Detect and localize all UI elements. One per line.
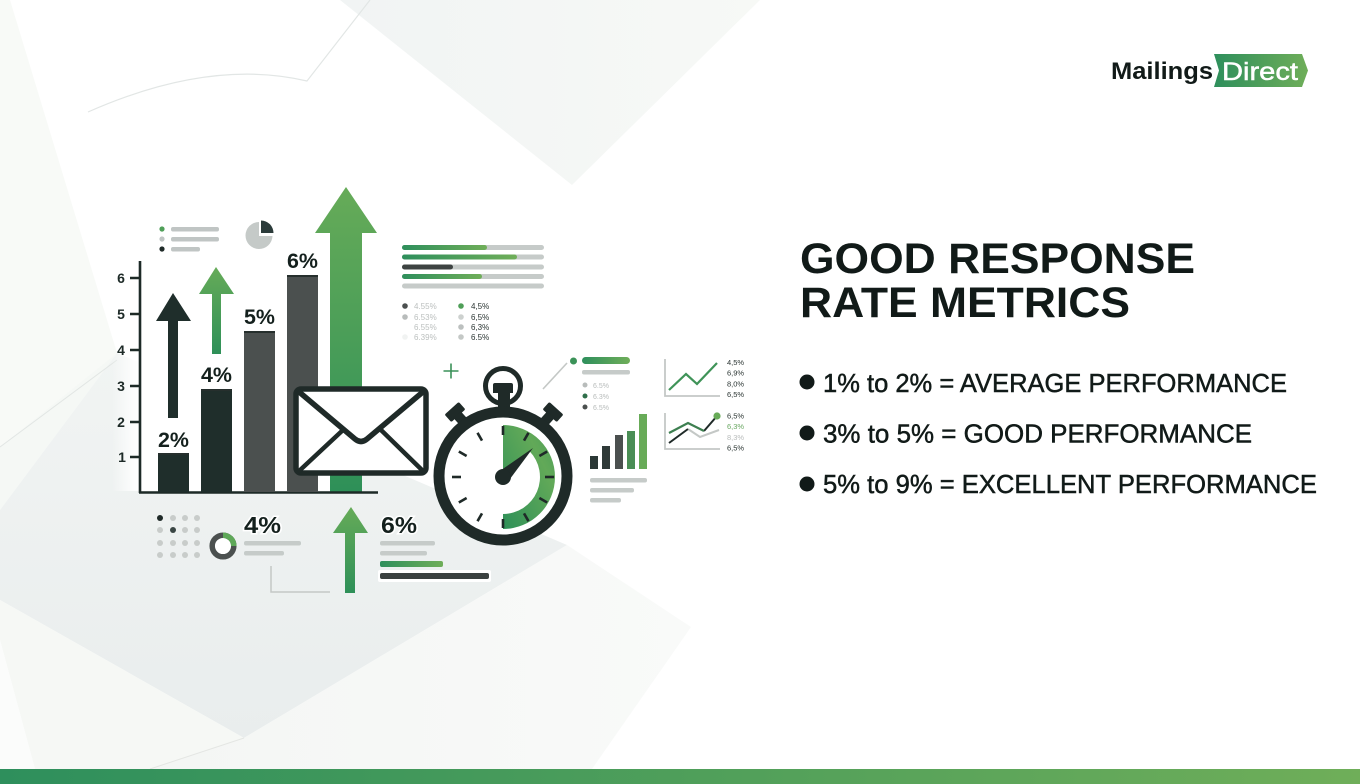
connector callout: 6.5% [593, 383, 609, 390]
chart white backing [112, 340, 332, 491]
bar chart with arrows [117, 187, 378, 493]
line chart one: 8,0% [727, 380, 744, 388]
percent legend: 6,5% [471, 313, 489, 322]
y axis labels [117, 270, 126, 465]
stat: 4% [244, 512, 301, 556]
axes [130, 261, 378, 493]
stopwatch ticks [452, 426, 554, 528]
percent legend: 6.55% [414, 323, 437, 332]
y axis labels: 3 [117, 378, 125, 394]
bottom green arrow [333, 507, 368, 593]
dot grid [157, 515, 200, 558]
percent legend: 6.53% [414, 313, 437, 322]
icon: stopwatch [439, 368, 567, 540]
percent legend: 4,5% [471, 302, 489, 311]
bottom green band [0, 769, 1360, 784]
title: RATE METRICS [800, 279, 1130, 327]
title: GOOD RESPONSE [800, 235, 1195, 283]
line chart two [665, 412, 744, 452]
logo: Mailings Direct [1111, 54, 1308, 87]
y axis labels: 2 [117, 414, 125, 430]
plus sign [444, 364, 458, 378]
stopwatch top loop [486, 368, 520, 404]
stat: 6% [378, 512, 491, 582]
bullet: good: 3% to 5% = GOOD PERFORMANCE [823, 418, 1252, 448]
line chart one [665, 358, 744, 399]
small legend top [159, 226, 219, 252]
logo word: Direct: Direct [1222, 58, 1298, 86]
bullet: excellent: 5% to 9% = EXCELLENT PERFORMANCE [823, 469, 1317, 499]
progress bars [402, 245, 544, 288]
stopwatch body [439, 412, 567, 540]
line chart one: 6,9% [727, 368, 744, 378]
big green arrow [315, 187, 377, 492]
small green arrow [199, 267, 234, 354]
percent legend: 6.39% [414, 333, 437, 342]
icon: envelope [296, 389, 426, 473]
donut chart [212, 535, 234, 557]
percent legend: 6.5% [471, 333, 489, 342]
performance list [800, 368, 1317, 499]
line chart two: 6,5% [727, 444, 744, 452]
title [800, 235, 1195, 327]
bar value labels: 4% [201, 364, 232, 387]
icon: pie chart [246, 220, 274, 249]
line chart two: 6,5% [727, 412, 744, 420]
bar value labels: 6% [287, 250, 318, 273]
percent legend: 4.55% [414, 302, 437, 311]
connector callout: 6.3% [593, 394, 609, 401]
logo badge [1214, 54, 1308, 87]
stopwatch side buttons [445, 402, 563, 427]
connector callout: 6.5% [593, 405, 609, 412]
stopwatch green sector [503, 425, 555, 529]
y axis labels: 4 [117, 342, 125, 358]
stat: 6%: 6% [381, 512, 417, 538]
stopwatch crown [493, 383, 513, 409]
dark arrow [156, 293, 191, 418]
line chart one: 6,5% [727, 390, 744, 399]
percent legend: 6,3% [471, 323, 489, 332]
bar value labels [158, 250, 318, 452]
mini bar chart [590, 414, 647, 502]
bar value labels: 5% [244, 306, 275, 329]
connector callout [543, 357, 630, 412]
y axis labels: 6 [117, 270, 125, 286]
line chart two: 8,3% [727, 433, 744, 442]
y axis labels: 5 [117, 306, 125, 322]
stopwatch hand [495, 448, 533, 485]
line chart two: 6,3% [727, 422, 744, 431]
bullet: average: 1% to 2% = AVERAGE PERFORMANCE [823, 368, 1287, 398]
y axis labels: 1 [118, 449, 126, 465]
line chart one: 4,5% [727, 358, 744, 367]
logo: Mailings Direct: Mailings [1111, 58, 1213, 85]
stat: 4%: 4% [244, 512, 281, 538]
percent legend [402, 302, 489, 342]
bars [158, 275, 318, 492]
corner axis [271, 566, 330, 592]
bar value labels: 2% [158, 429, 189, 452]
